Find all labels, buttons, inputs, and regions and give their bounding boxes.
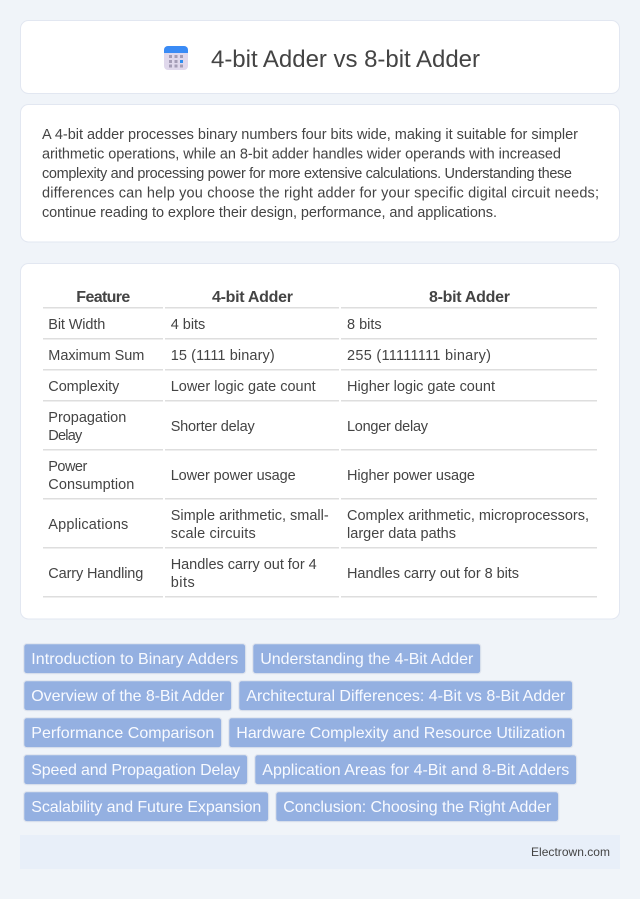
row: applications: Complex arithmetic, microprocessors, bbox=[347, 508, 589, 524]
table header: 4-bit Adder bbox=[212, 289, 293, 306]
panel: introduction bbox=[20, 104, 620, 242]
row: power consumption: Power bbox=[48, 459, 87, 475]
tag: understanding 4-bit bbox=[253, 644, 481, 674]
row: carry handling: Handles carry out for 4 bbox=[171, 557, 317, 573]
row: applications: Applications bbox=[48, 517, 128, 533]
row: maximum sum bbox=[43, 348, 597, 370]
row: applications: Simple arithmetic, small- bbox=[171, 508, 329, 524]
tag: hardware complexity bbox=[229, 718, 573, 748]
tag: hardware complexity: Hardware Complexity and Resource Utilization bbox=[236, 725, 565, 742]
table header bbox=[43, 289, 597, 308]
tag: architectural differences bbox=[239, 681, 573, 711]
tag: performance comparison bbox=[24, 718, 222, 748]
row: maximum sum: 15 (1111 binary) bbox=[171, 348, 275, 364]
tag: application areas: Application Areas for 4-Bit and 8-Bit Adders bbox=[262, 762, 569, 779]
panel: title card bbox=[20, 20, 620, 94]
row: power consumption: Consumption bbox=[48, 477, 134, 493]
tag: performance comparison: Performance Comparison bbox=[31, 725, 214, 742]
panel: comparison table bbox=[20, 264, 620, 619]
row: complexity bbox=[43, 379, 597, 402]
row: applications: scale circuits bbox=[171, 526, 256, 542]
footer bbox=[20, 835, 620, 869]
row: bit width: Bit Width bbox=[48, 317, 105, 333]
intro paragraph: arithmetic operations, while an 8-bit adder handles wider operands with increased bbox=[42, 146, 561, 162]
intro paragraph: differences can help you choose the right adder for your specific digital circuit needs; bbox=[42, 186, 599, 202]
intro paragraph: continue reading to explore their design, performance, and applications. bbox=[42, 205, 497, 221]
table header: Feature bbox=[76, 289, 130, 306]
row: propagation delay: Propagation bbox=[48, 410, 126, 426]
tag: application areas bbox=[255, 755, 577, 785]
tag: introduction bbox=[24, 644, 246, 674]
row: maximum sum: 255 (11111111 binary) bbox=[347, 348, 491, 364]
tag: scalability bbox=[24, 792, 269, 822]
row: carry handling: Carry Handling bbox=[48, 566, 143, 582]
row: bit width: 4 bits bbox=[171, 317, 205, 333]
table header: 8-bit Adder bbox=[429, 289, 510, 306]
row: complexity: Lower logic gate count bbox=[171, 379, 316, 395]
tag: overview 8-bit: Overview of the 8-Bit Adder bbox=[31, 688, 225, 705]
row: propagation delay bbox=[43, 410, 597, 450]
row: applications bbox=[43, 508, 597, 548]
row: carry handling: bits bbox=[171, 575, 195, 591]
intro paragraph: complexity and processing power for more extensive calculations. Understanding these bbox=[42, 166, 572, 182]
title: 4-bit Adder vs 8-bit Adder bbox=[211, 46, 480, 73]
row: power consumption: Lower power usage bbox=[171, 468, 296, 484]
tag: speed and delay bbox=[24, 755, 248, 785]
row: power consumption bbox=[43, 459, 597, 500]
tag: architectural differences: Architectural Differences: 4-Bit vs 8-Bit Adder bbox=[246, 688, 566, 705]
tag: overview 8-bit bbox=[24, 681, 232, 711]
row: complexity: Complexity bbox=[48, 379, 120, 395]
tag: conclusion bbox=[276, 792, 559, 822]
intro paragraph bbox=[42, 127, 599, 221]
row: propagation delay: Shorter delay bbox=[171, 419, 255, 435]
row: carry handling bbox=[43, 557, 597, 598]
intro paragraph: A 4-bit adder processes binary numbers four bits wide, making it suitable for simpler bbox=[42, 127, 578, 143]
icon: calendar grid bbox=[164, 46, 188, 70]
row: propagation delay: Delay bbox=[48, 428, 83, 444]
topic tags bbox=[24, 644, 577, 822]
tag: understanding 4-bit: Understanding the 4-Bit Adder bbox=[260, 651, 474, 668]
footer credit: Electrown.com bbox=[531, 845, 610, 859]
row: carry handling: Handles carry out for 8 bits bbox=[347, 566, 519, 582]
row: maximum sum: Maximum Sum bbox=[48, 348, 144, 364]
row: power consumption: Higher power usage bbox=[347, 468, 475, 484]
row: bit width bbox=[43, 317, 597, 340]
row: bit width: 8 bits bbox=[347, 317, 382, 333]
tag: speed and delay: Speed and Propagation Delay bbox=[31, 762, 240, 779]
tag: scalability: Scalability and Future Expansion bbox=[31, 799, 261, 816]
tag: introduction: Introduction to Binary Adders bbox=[31, 651, 238, 668]
row: complexity: Higher logic gate count bbox=[347, 379, 495, 395]
tag: conclusion: Conclusion: Choosing the Right Adder bbox=[283, 799, 552, 816]
row: applications: larger data paths bbox=[347, 526, 456, 542]
row: propagation delay: Longer delay bbox=[347, 419, 429, 435]
